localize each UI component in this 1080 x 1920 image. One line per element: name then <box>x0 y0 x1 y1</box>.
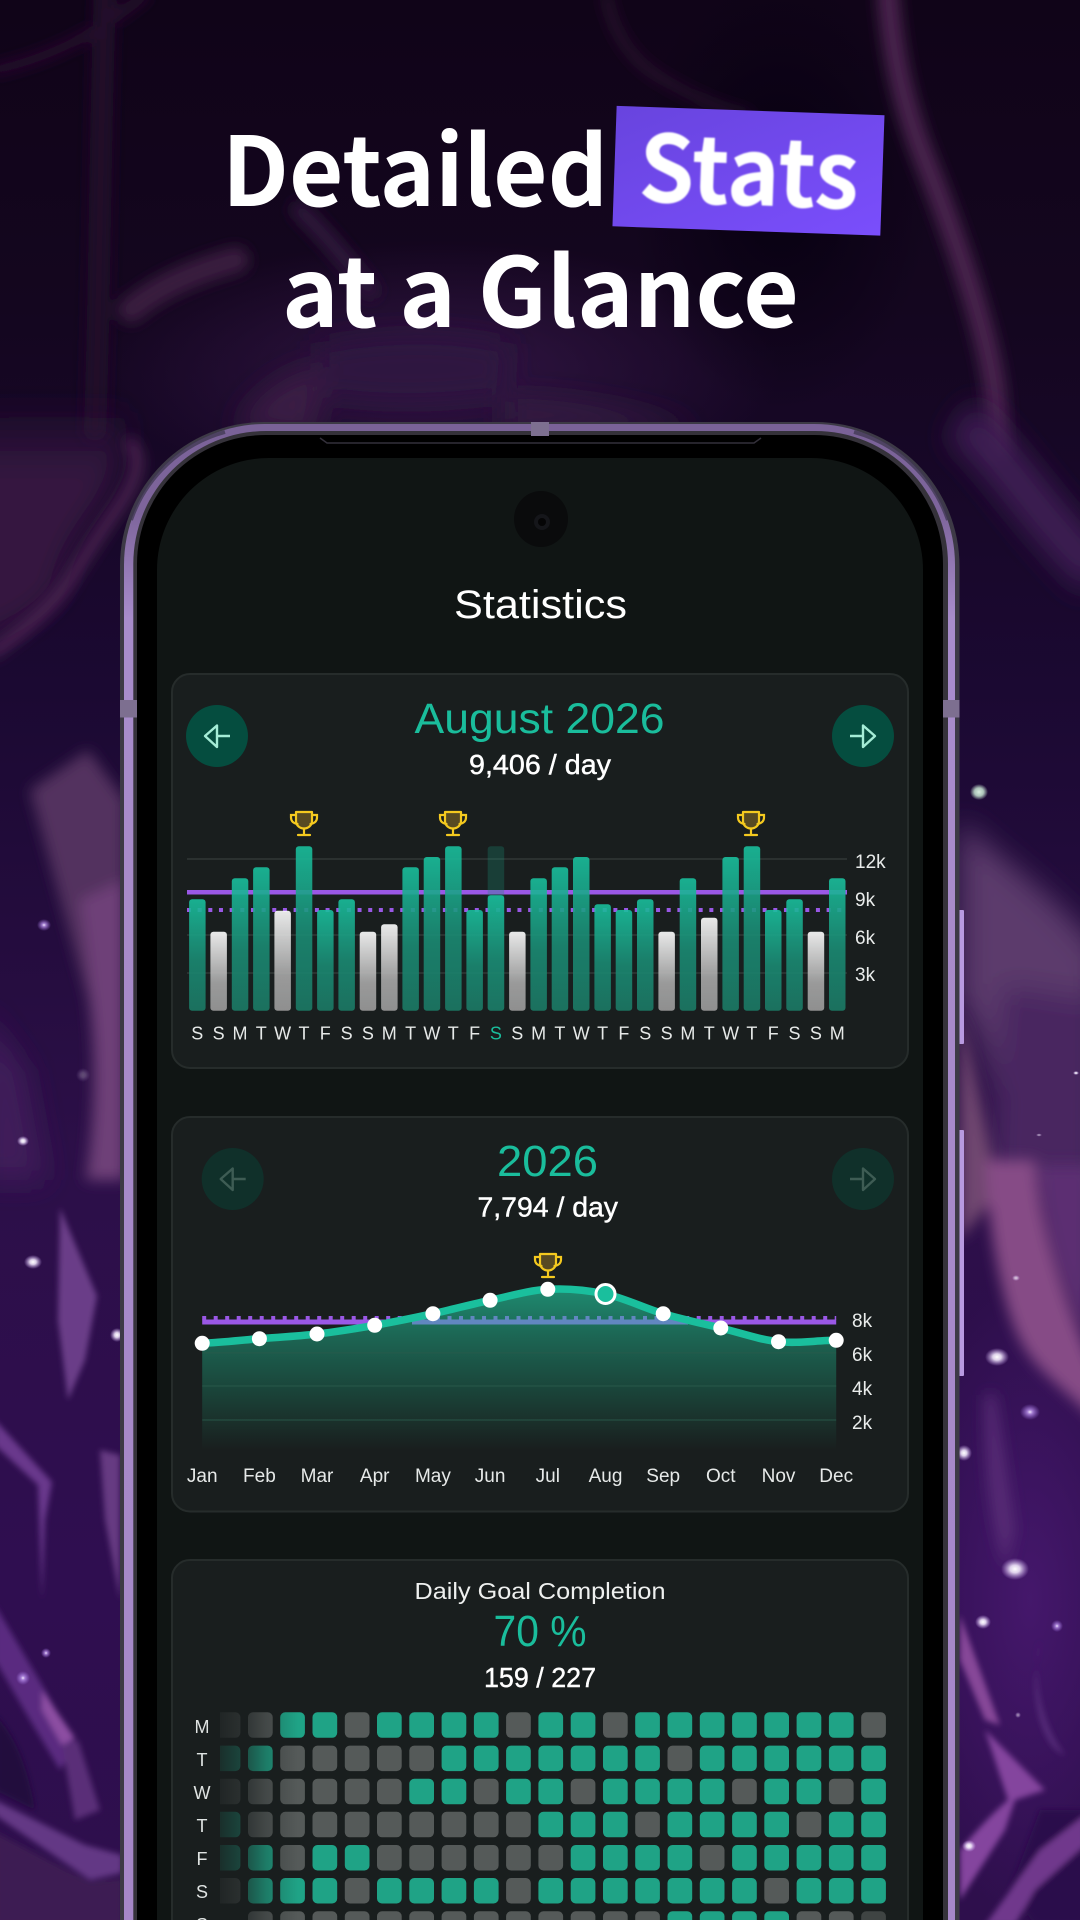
day labels: S <box>639 1024 651 1044</box>
month labels: Feb <box>243 1466 276 1487</box>
completion percent: 70 % <box>494 1607 586 1656</box>
day labels <box>191 1024 845 1044</box>
day labels: M <box>382 1024 397 1044</box>
title line two: at a Glance <box>282 216 799 355</box>
month labels: Mar <box>301 1466 334 1487</box>
day labels: S <box>490 1024 502 1044</box>
data points <box>195 1282 844 1351</box>
day labels: S <box>213 1024 225 1044</box>
heatmap cells <box>216 1712 886 1920</box>
year average: 7,794 / day <box>478 1192 618 1223</box>
y-axis labels: 6k <box>852 1345 873 1366</box>
panel: monthly bar chart <box>172 674 908 1068</box>
weekday labels: M <box>194 1717 210 1737</box>
day labels: W <box>573 1024 590 1044</box>
screen heading: Statistics <box>454 583 627 627</box>
day labels: M <box>232 1024 248 1044</box>
day labels: T <box>405 1024 416 1044</box>
icon: disabled previous arrow <box>202 1148 264 1210</box>
panel: yearly line chart <box>172 1117 908 1512</box>
y-axis labels: 3k <box>855 965 876 986</box>
highlight: Stats tag: Stats <box>637 93 861 236</box>
day labels: T <box>448 1024 459 1044</box>
icon: trophy <box>291 812 317 835</box>
panel heading: Daily Goal Completion <box>414 1578 666 1604</box>
day labels: F <box>618 1024 629 1044</box>
y-axis labels: 2k <box>852 1413 873 1434</box>
day labels: M <box>531 1024 546 1044</box>
day labels: S <box>810 1024 822 1044</box>
month labels: Jun <box>475 1466 505 1487</box>
average lines <box>187 892 847 910</box>
camera punch hole <box>514 491 568 547</box>
icon: trophy <box>738 812 764 835</box>
month labels: May <box>415 1466 451 1487</box>
side buttons <box>958 910 964 1376</box>
weekday labels <box>194 1717 210 1920</box>
y-axis labels: 9k <box>855 890 876 911</box>
goal lines <box>202 1318 836 1322</box>
corner shading on frame <box>131 432 948 520</box>
day labels: S <box>362 1024 374 1044</box>
panel: daily goal completion heatmap <box>172 1560 908 1920</box>
y-axis labels <box>852 1311 873 1434</box>
antenna bands <box>120 422 960 718</box>
icon: next arrow <box>832 705 894 767</box>
phone frame <box>120 422 964 1920</box>
y-axis labels: 4k <box>852 1379 873 1400</box>
day labels: T <box>704 1024 715 1044</box>
month labels: Dec <box>819 1466 853 1487</box>
day labels: F <box>469 1024 480 1044</box>
weekday labels: T <box>196 1816 208 1836</box>
year title: 2026 <box>497 1137 598 1186</box>
day labels: T <box>256 1024 267 1044</box>
weekday labels: F <box>196 1849 208 1869</box>
y-axis labels: 6k <box>855 928 876 949</box>
day labels: W <box>274 1024 291 1044</box>
current-day ghost bar <box>488 846 504 1011</box>
day labels: S <box>661 1024 673 1044</box>
month labels: Sep <box>646 1466 680 1487</box>
month labels: Jan <box>187 1466 218 1487</box>
icon: disabled next arrow <box>832 1148 894 1210</box>
chart gridlines <box>202 1353 836 1420</box>
icon: previous arrow <box>186 705 248 767</box>
day labels: F <box>768 1024 779 1044</box>
day labels: M <box>680 1024 695 1044</box>
month labels: Aug <box>589 1466 622 1487</box>
title word: Detailed: Detailed <box>222 95 608 234</box>
day labels: S <box>341 1024 353 1044</box>
phone screen <box>157 458 923 1920</box>
month labels <box>187 1466 853 1487</box>
y-axis labels <box>855 852 886 986</box>
area under line <box>202 1289 836 1450</box>
day labels: F <box>320 1024 331 1044</box>
month labels: Jul <box>536 1466 560 1487</box>
day labels: T <box>298 1024 310 1044</box>
day labels: T <box>554 1024 565 1044</box>
day labels: S <box>191 1024 203 1044</box>
current month marker <box>596 1284 615 1304</box>
background sparkles <box>16 784 1079 1852</box>
icon: trophy <box>535 1254 561 1277</box>
completion count: 159 / 227 <box>484 1662 596 1693</box>
day labels: S <box>511 1024 523 1044</box>
bars <box>189 846 846 1011</box>
y-axis labels: 12k <box>855 852 886 873</box>
day labels: W <box>722 1024 739 1044</box>
month title: August 2026 <box>414 695 664 743</box>
weekday labels: T <box>196 1750 208 1770</box>
day labels: T <box>746 1024 757 1044</box>
trend line <box>202 1289 836 1343</box>
goal line seen through area <box>412 1318 688 1322</box>
chart gridlines <box>187 859 847 973</box>
day labels: S <box>788 1024 801 1044</box>
icon: trophy <box>440 812 466 835</box>
month labels: Oct <box>706 1466 736 1487</box>
month average: 9,406 / day <box>469 749 611 780</box>
month labels: Apr <box>360 1466 390 1487</box>
day labels: T <box>597 1024 608 1044</box>
title <box>222 92 885 355</box>
month labels: Nov <box>762 1466 796 1487</box>
day labels: W <box>423 1024 440 1044</box>
weekday labels: S <box>196 1882 208 1902</box>
y-axis labels: 8k <box>852 1311 873 1332</box>
weekday labels: W <box>194 1783 210 1803</box>
day labels: M <box>830 1024 845 1044</box>
